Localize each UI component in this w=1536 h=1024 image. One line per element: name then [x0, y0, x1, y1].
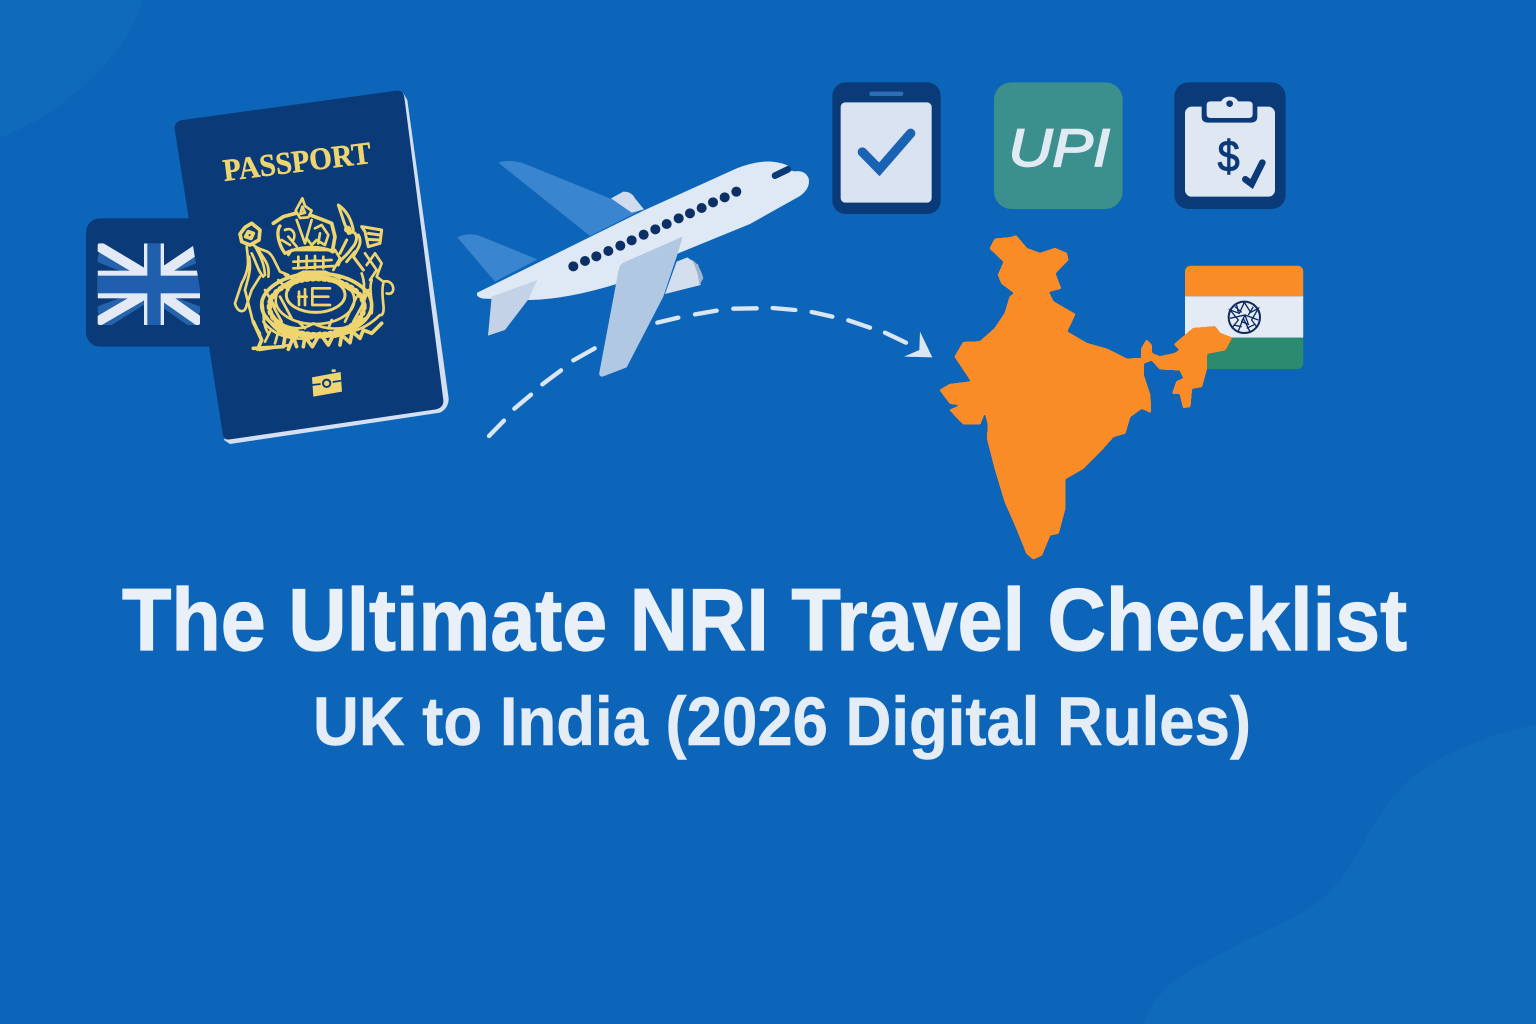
- icon: UPI: UPI: [1008, 119, 1110, 178]
- top icons: [832, 82, 1286, 214]
- Indian flag: [1185, 266, 1303, 369]
- main wing: [599, 237, 683, 377]
- passport cover: [175, 91, 443, 440]
- icon: clipboard with dollar: [1174, 82, 1286, 209]
- flag tile: [86, 218, 219, 347]
- icon: phone with check: [832, 82, 941, 214]
- dashed flight path: [489, 308, 932, 436]
- passport pages edge: [224, 93, 449, 444]
- tail fin: [457, 234, 537, 282]
- coat of arms: [235, 198, 393, 350]
- chip symbol: [312, 369, 342, 397]
- cabin windows: [568, 187, 741, 271]
- Ashoka chakra: [1229, 302, 1260, 333]
- passport heading: PASSPORT: [221, 135, 373, 188]
- map of India: [940, 236, 1232, 559]
- subtitle: UK to India (2026 Digital Rules): [313, 683, 1251, 760]
- arrowhead: [904, 332, 932, 357]
- far wing: [498, 161, 640, 236]
- infographic canvas: [86, 82, 1407, 760]
- tail stabiliser: [488, 280, 537, 336]
- fuselage: [477, 162, 809, 300]
- icon: clipboard with dollar: $: [1218, 132, 1240, 181]
- India flag and map: [940, 236, 1303, 559]
- UK passport with flag tile: [86, 91, 449, 444]
- airplane: [457, 161, 809, 377]
- icon: UPI: [994, 82, 1123, 209]
- cockpit window: [775, 169, 788, 176]
- near engine: [665, 257, 703, 294]
- far engine: [611, 192, 644, 213]
- title: The Ultimate NRI Travel Checklist: [122, 570, 1407, 669]
